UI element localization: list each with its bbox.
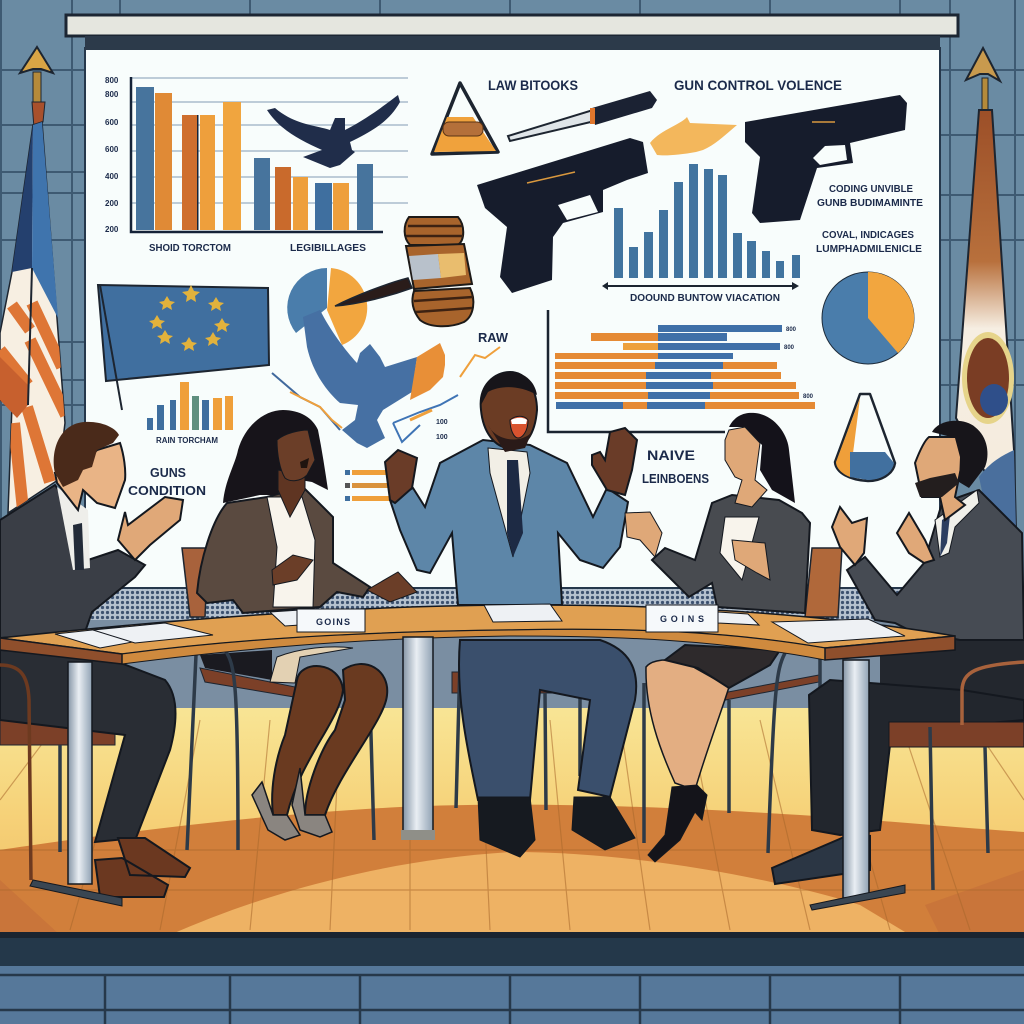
icon: gavel xyxy=(335,217,473,326)
label: guns condition xyxy=(128,465,206,498)
icon: pen xyxy=(508,91,657,141)
person: man left xyxy=(0,422,190,897)
chart: grouped bars top left: 800 xyxy=(105,76,119,85)
heading: law books: LAW BITOOKS xyxy=(488,77,578,93)
chart: grouped bars top left xyxy=(105,76,408,254)
chart: histogram xyxy=(602,164,800,304)
chart: grouped bars top left: 600 xyxy=(105,118,119,127)
text: native legends: LEINBOENS xyxy=(642,471,709,486)
chart: grouped bars top left: 600 xyxy=(105,145,119,154)
chart: pie centre xyxy=(287,268,367,345)
chart: histogram: DOOUND BUNTOW VIACATION xyxy=(630,293,780,304)
text: right caption two: COVAL, INDICAGES xyxy=(822,230,914,241)
small legend xyxy=(345,470,390,501)
chart: horizontal stacked bars xyxy=(548,310,815,432)
icon: dove xyxy=(303,310,445,448)
chart: pie right xyxy=(822,272,914,364)
small line arrows: 100 xyxy=(436,434,448,441)
table papers and name cards: GOINS xyxy=(660,614,704,624)
table papers and name cards: GOINS xyxy=(316,617,350,627)
table xyxy=(0,605,955,910)
text: right caption one xyxy=(817,184,923,209)
chart: grouped bars top left: 200 xyxy=(105,199,119,208)
person: woman right xyxy=(625,413,810,862)
chart: small bars: RAIN TORCHAM xyxy=(156,436,218,445)
text: right caption one: GUNB BUDIMAMINTE xyxy=(817,198,923,209)
chart: grouped bars top left: 800 xyxy=(105,90,119,99)
text: right caption two: LUMPHADMILENICLE xyxy=(816,244,922,255)
icon: pistol right xyxy=(745,95,907,223)
text: right caption one: CODING UNVIBLE xyxy=(829,184,913,195)
flag: USA xyxy=(0,47,66,513)
label: guns condition: GUNS xyxy=(150,465,186,480)
text: native legends xyxy=(642,447,709,486)
icon: pistol centre xyxy=(477,138,648,293)
label: guns condition: CONDITION xyxy=(128,483,206,498)
chart: horizontal stacked bars: 800 xyxy=(786,327,797,333)
floor xyxy=(0,708,1024,940)
flag: state xyxy=(956,48,1016,530)
icon: eagle top xyxy=(267,95,400,168)
stage base and floor tiles xyxy=(0,938,1024,1024)
icon: EU flag xyxy=(98,285,269,410)
person: man right xyxy=(772,421,1024,884)
text: native legends: NAIVE xyxy=(647,447,695,463)
heading: gun control violence: GUN CONTROL VOLENCE xyxy=(674,77,842,93)
icon: cone xyxy=(835,394,895,481)
icon: muzzle flash xyxy=(650,117,737,155)
person: centre man xyxy=(385,372,637,857)
chart: grouped bars top left: 400 xyxy=(105,172,119,181)
chart: small bars xyxy=(147,382,233,445)
projection screen xyxy=(66,15,958,588)
table papers and name cards xyxy=(55,604,905,648)
small line arrows: 100 xyxy=(436,419,448,426)
chart: horizontal stacked bars: 800 xyxy=(803,394,814,400)
small line arrows xyxy=(272,347,500,442)
icon: law book triangle xyxy=(432,83,498,154)
chart: grouped bars top left: LEGIBILLAGES xyxy=(290,243,366,254)
chair frames in front xyxy=(0,662,1024,890)
chart: horizontal stacked bars: 800 xyxy=(784,345,795,351)
chart: grouped bars top left: SHOID TORCTOM xyxy=(149,243,231,254)
person: woman left xyxy=(197,410,417,840)
chart: grouped bars top left: 200 xyxy=(105,225,119,234)
chairs behind people xyxy=(0,548,1024,853)
text: right caption two xyxy=(816,230,922,255)
label: raw: RAW xyxy=(478,330,509,345)
